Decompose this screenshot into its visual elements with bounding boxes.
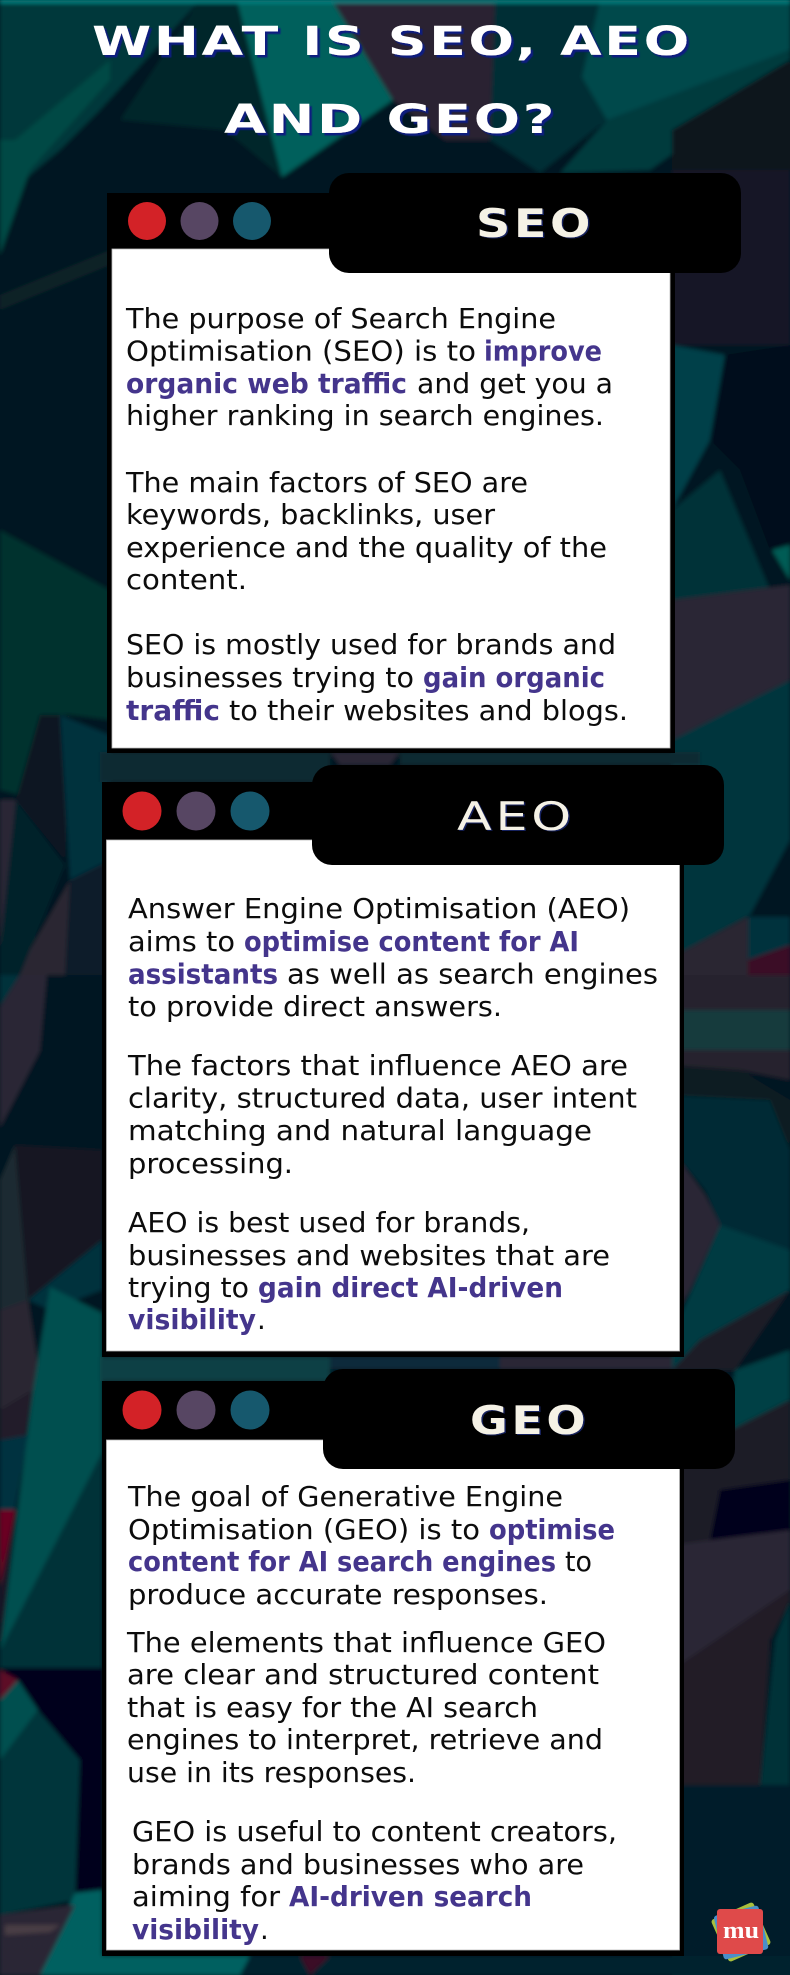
GEO heading tab: GEO <box>470 1399 589 1444</box>
AEO paragraph 2 <box>127 1050 637 1180</box>
GEO paragraph 1: optimise <box>489 1514 615 1546</box>
AEO paragraph 1 <box>128 893 658 1023</box>
SEO paragraph 3: gain organic <box>423 662 605 694</box>
AEO paragraph 1: assistants <box>128 958 278 990</box>
GEO paragraph 1: to <box>565 1546 592 1578</box>
AEO window dots <box>122 792 270 830</box>
GEO paragraph 2: engines to interpret, retrieve and <box>127 1724 603 1756</box>
AEO paragraph 3: visibility <box>128 1304 256 1336</box>
panel: AEO <box>102 765 724 1357</box>
GEO paragraph 3: brands and businesses who are <box>132 1849 584 1881</box>
SEO paragraph 3: traffic <box>126 695 220 727</box>
GEO heading tab <box>323 1369 735 1469</box>
SEO paragraph 3: to their websites and blogs. <box>229 695 628 727</box>
AEO paragraph 3: businesses and websites that are <box>128 1240 610 1272</box>
GEO window frame <box>102 1381 684 1956</box>
GEO paragraph 1: produce accurate responses. <box>128 1579 548 1611</box>
logo: mu <box>711 1902 771 1962</box>
SEO paragraph 2: content. <box>126 564 247 596</box>
GEO paragraph 1: Optimisation (GEO) is to <box>128 1514 480 1546</box>
GEO window dots <box>122 1390 270 1430</box>
SEO paragraph 1: and get you a <box>417 368 613 400</box>
GEO paragraph 1 <box>127 1481 615 1611</box>
logo: mu: mu <box>723 1918 759 1944</box>
GEO paragraph 2: The elements that influence GEO <box>126 1627 606 1659</box>
AEO paragraph 3: AEO is best used for brands, <box>128 1207 530 1239</box>
SEO window frame <box>107 193 675 753</box>
AEO paragraph 1: optimise content for AI <box>244 926 579 958</box>
GEO paragraph 2: use in its responses. <box>127 1757 416 1789</box>
GEO paragraph 3: visibility <box>132 1914 259 1946</box>
AEO paragraph 3: trying to <box>128 1272 249 1304</box>
SEO paragraph 3: businesses trying to <box>126 662 414 694</box>
AEO paragraph 1: Answer Engine Optimisation (AEO) <box>128 893 630 925</box>
AEO window frame <box>102 782 684 1357</box>
panel: GEO <box>102 1369 735 1956</box>
SEO paragraph 3: SEO is mostly used for brands and <box>126 629 616 661</box>
AEO paragraph 2: clarity, structured data, user intent <box>128 1082 637 1114</box>
AEO heading tab <box>312 765 724 865</box>
SEO paragraph 1: Optimisation (SEO) is to <box>126 336 476 368</box>
GEO paragraph 2: that is easy for the AI search <box>127 1692 538 1724</box>
GEO paragraph 1: The goal of Generative Engine <box>127 1481 563 1513</box>
title <box>92 19 692 143</box>
GEO paragraph 3 <box>132 1816 617 1946</box>
GEO paragraph 2 <box>126 1627 606 1789</box>
SEO paragraph 3 <box>126 629 628 727</box>
AEO paragraph 3: . <box>257 1304 266 1336</box>
GEO paragraph 2: are clear and structured content <box>127 1659 599 1691</box>
SEO paragraph 2: experience and the quality of the <box>126 532 607 564</box>
SEO paragraph 2 <box>125 467 607 596</box>
GEO paragraph 3: . <box>260 1914 269 1946</box>
GEO paragraph 3: AI-driven search <box>289 1881 532 1913</box>
AEO paragraph 1: as well as search engines <box>287 958 658 990</box>
AEO paragraph 1: aims to <box>128 926 235 958</box>
AEO heading tab: AEO <box>457 795 575 840</box>
panel: SEO <box>107 173 741 753</box>
GEO paragraph 3: aiming for <box>132 1881 281 1913</box>
AEO paragraph 2: processing. <box>128 1148 293 1180</box>
SEO paragraph 2: The main factors of SEO are <box>125 467 528 499</box>
SEO paragraph 1: higher ranking in search engines. <box>126 400 604 432</box>
title: AND GEO? <box>224 97 557 143</box>
AEO paragraph 1: to provide direct answers. <box>128 991 502 1023</box>
SEO window dots <box>128 202 271 240</box>
AEO paragraph 2: The factors that influence AEO are <box>127 1050 628 1082</box>
GEO content area <box>106 1440 680 1950</box>
AEO paragraph 3: gain direct AI-driven <box>258 1272 563 1304</box>
SEO content area <box>112 249 670 748</box>
GEO paragraph 1: content for AI search engines <box>128 1546 556 1578</box>
AEO content area <box>106 840 680 1351</box>
SEO paragraph 1 <box>125 303 613 432</box>
SEO paragraph 1: organic web traffic <box>126 368 407 400</box>
AEO paragraph 3 <box>128 1207 610 1336</box>
title: WHAT IS SEO, AEO <box>92 19 692 65</box>
SEO heading tab: SEO <box>476 202 594 247</box>
SEO paragraph 1: The purpose of Search Engine <box>125 303 556 335</box>
GEO paragraph 3: GEO is useful to content creators, <box>132 1816 617 1848</box>
SEO paragraph 2: keywords, backlinks, user <box>126 499 496 531</box>
SEO paragraph 1: improve <box>484 336 602 368</box>
AEO paragraph 2: matching and natural language <box>128 1115 592 1147</box>
SEO heading tab <box>329 173 741 273</box>
